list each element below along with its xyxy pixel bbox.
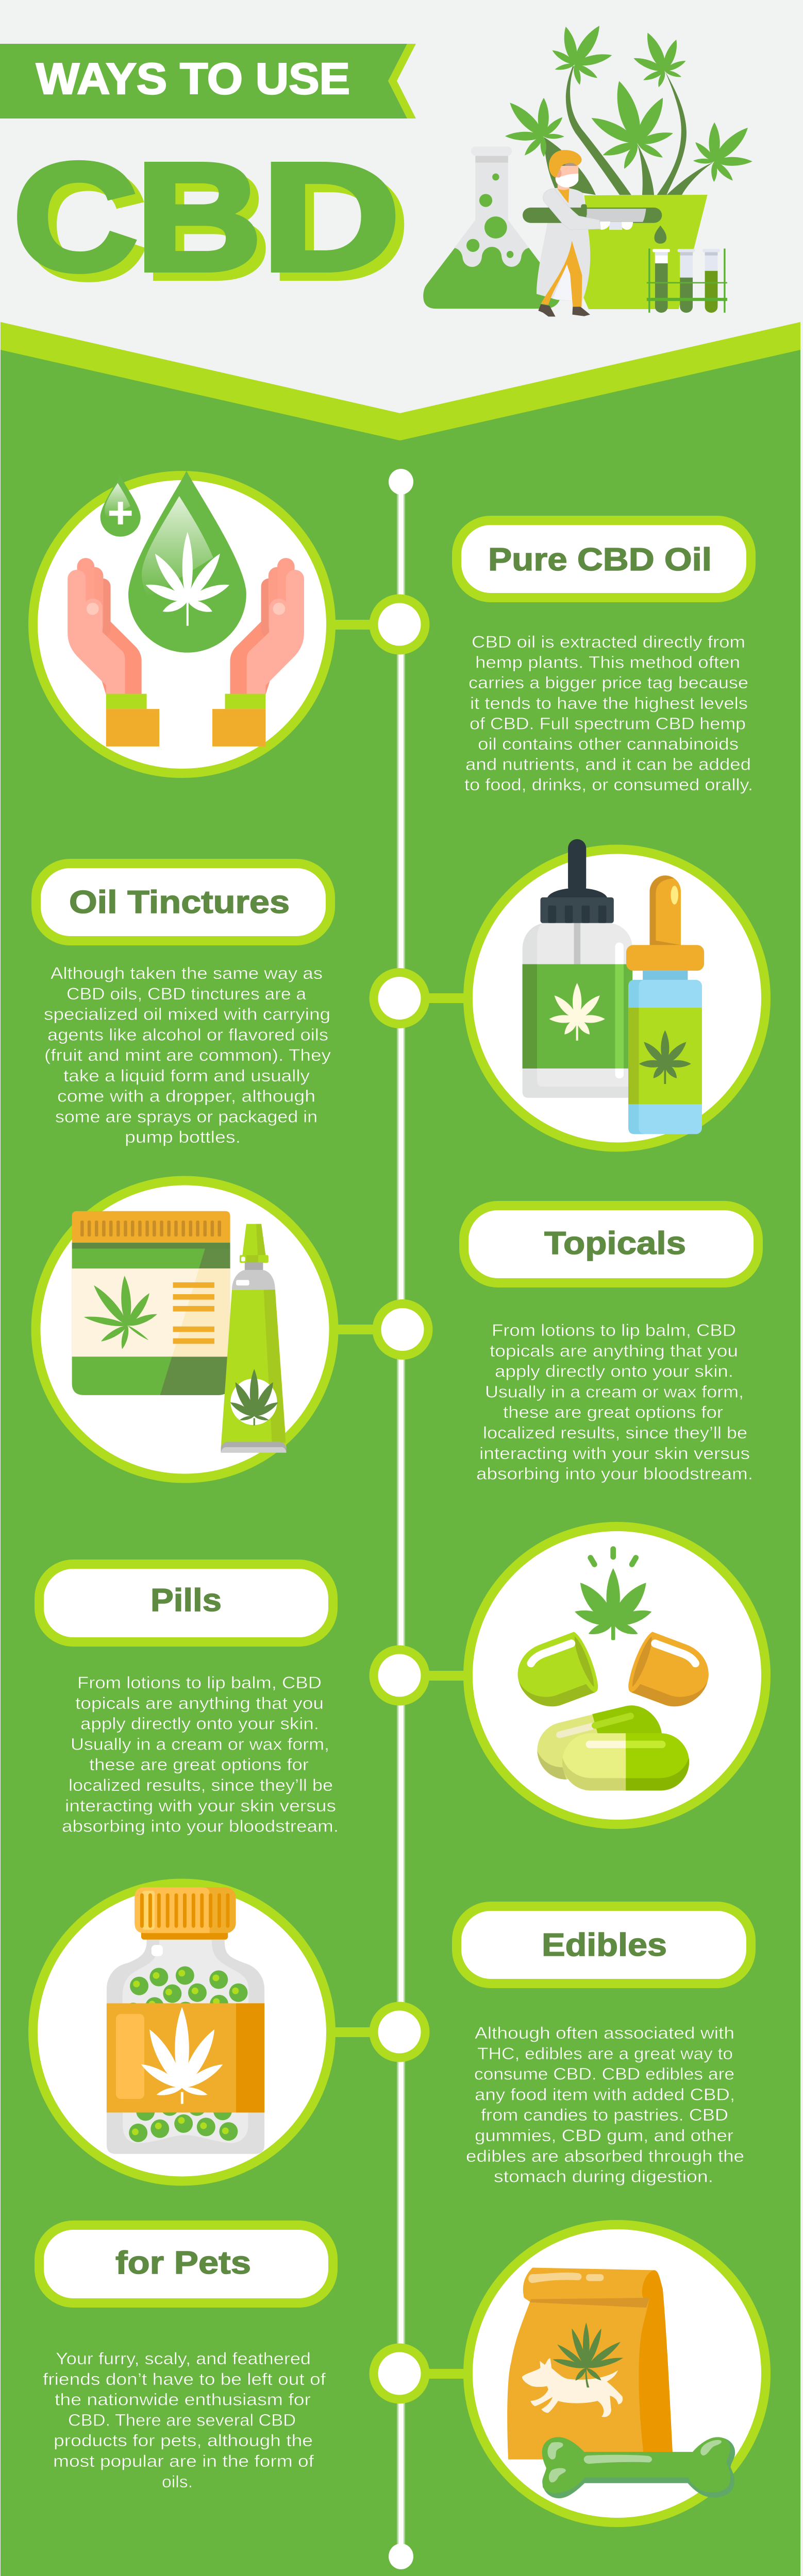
heading: CBD: B: [136, 131, 262, 302]
text block: Pure CBD Oil description: and nutrients, and it can be added: [465, 755, 751, 774]
text block: Edibles description: [466, 2024, 744, 2186]
text block: for Pets description: CBD. There are several CBD: [68, 2411, 296, 2429]
left hand: [68, 558, 159, 747]
heading: CBD: C: [13, 132, 138, 303]
text block: Pure CBD Oil description: carries a bigger price tag because: [469, 673, 748, 692]
text block: Oil Tinctures description: specialized oil mixed with carrying: [44, 1005, 330, 1023]
text block: Oil Tinctures description: take a liquid form and usually: [63, 1066, 310, 1085]
panel: Topicals title: [464, 1206, 758, 1283]
text block: Topicals description: these are great options for: [503, 1403, 723, 1421]
label: [107, 2003, 264, 2112]
text block: Edibles description: gummies, CBD gum, and other: [475, 2126, 733, 2145]
heading: CBD: B: [144, 139, 271, 311]
heading: CBD: [13, 131, 409, 311]
scientist: [523, 150, 662, 316]
text block: for Pets description: friends don’t have to be left out of: [43, 2370, 326, 2388]
panel: Pills title: [39, 1564, 333, 1642]
text block: Pure CBD Oil description: CBD oil is extracted directly from: [472, 633, 745, 651]
rays: [591, 1549, 636, 1564]
timeline node 1: [374, 599, 425, 650]
icon: pill bottle: [107, 1887, 264, 2154]
text block: Pills description: [62, 1673, 339, 1836]
tube: [221, 1224, 287, 1453]
dark dropper bottle: [523, 839, 632, 1098]
flask: [423, 146, 560, 309]
text block: for Pets description: most popular are in the form of: [53, 2452, 314, 2470]
panel: for Pets title: [39, 2225, 333, 2303]
text block: Topicals description: From lotions to lip balm, CBD: [492, 1321, 736, 1340]
text block: Pills description: From lotions to lip balm, CBD: [77, 1673, 322, 1692]
text block: Topicals description: [476, 1321, 753, 1483]
text block: Topicals description: Usually in a cream or wax form,: [485, 1382, 744, 1401]
panel: Topicals illustration circle: [36, 1181, 334, 1479]
panel: Pure CBD Oil illustration circle: [33, 476, 331, 773]
test tube rack: [647, 248, 727, 313]
text block: Pills description: Usually in a cream or wax form,: [71, 1735, 329, 1753]
text block: Pure CBD Oil description: to food, drinks, or consumed orally.: [464, 775, 753, 794]
green leaf: [573, 1568, 654, 1640]
text block: Oil Tinctures description: [44, 964, 331, 1146]
text block: Oil Tinctures description: pump bottles.: [125, 1128, 241, 1146]
icon: cream jar and tube: [72, 1211, 287, 1453]
right hand: [212, 558, 304, 747]
text block: Oil Tinctures description: come with a dropper, although: [57, 1087, 315, 1106]
text block: Pills description: interacting with your skin versus: [65, 1797, 336, 1815]
icon: hands holding oil drop: [68, 471, 304, 747]
text block: Topicals description: interacting with your skin versus: [479, 1444, 750, 1463]
open capsule halves: [517, 1632, 598, 1706]
text block: Pure CBD Oil description: it tends to have the highest levels: [470, 694, 748, 713]
orange dropper blue bottle: [626, 875, 704, 1134]
text block: Topicals description: absorbing into your bloodstream.: [476, 1465, 753, 1483]
panel: Pills title: Pills: [150, 1583, 222, 1618]
text block: for Pets description: products for pets, although the: [54, 2431, 313, 2450]
text block: Edibles description: any food item with added CBD,: [475, 2085, 735, 2104]
white cannabis leaf: [144, 532, 231, 626]
white leaf: [139, 2007, 225, 2104]
dog: [522, 2358, 623, 2417]
front capsule: [562, 1733, 689, 1790]
heading: CBD: D: [270, 139, 409, 311]
bone: [542, 2437, 735, 2498]
panel: Oil Tinctures title: [36, 863, 330, 941]
icon: capsules and leaf: [517, 1549, 709, 1790]
timeline node 2: [374, 973, 425, 1024]
timeline node 5: [374, 2006, 425, 2058]
jar: [72, 1211, 230, 1395]
text block: Topicals description: localized results, since they’ll be: [483, 1423, 747, 1442]
timeline node 4: [374, 1650, 425, 1701]
cannabis leaves: [505, 23, 752, 183]
drop highlight: [142, 496, 213, 597]
bag: [507, 2267, 673, 2460]
heading: CBD: D: [261, 131, 400, 303]
text block: Edibles description: THC, edibles are a great way to: [477, 2044, 733, 2063]
text block: Edibles description: from candies to pastries. CBD: [481, 2106, 728, 2124]
title banner: [0, 44, 416, 118]
text block: Edibles description: consume CBD. CBD edibles are: [474, 2065, 734, 2083]
icon: pet food bag and bone: [507, 2267, 735, 2498]
icon: dropper bottles: [523, 839, 704, 1134]
text block: Pills description: apply directly onto your skin.: [80, 1715, 319, 1733]
text block: Topicals description: apply directly onto your skin.: [495, 1362, 733, 1381]
text block: Topicals description: topicals are anything that you: [490, 1342, 738, 1360]
panel: Oil Tinctures title: Oil Tinctures: [69, 885, 290, 920]
text block: for Pets description: [43, 2349, 326, 2491]
panel: Pills illustration circle: [468, 1527, 766, 1824]
panel: Edibles illustration circle: [33, 1884, 331, 2181]
title banner: WAYS TO USE: [36, 55, 350, 104]
text block: Pills description: localized results, since they’ll be: [69, 1776, 333, 1794]
leaf on bag: [552, 2323, 624, 2387]
text block: Pure CBD Oil description: [464, 633, 753, 794]
panel: Oil Tinctures illustration circle: [468, 849, 766, 1147]
text block: Pills description: topicals are anything that you: [75, 1694, 324, 1713]
panel: Topicals title: Topicals: [544, 1226, 686, 1261]
panel: for Pets illustration circle: [468, 2225, 766, 2522]
timeline node 6: [374, 2348, 425, 2399]
text block: Oil Tinctures description: (fruit and mint are common). They: [44, 1046, 331, 1064]
small drop with plus: [101, 474, 141, 537]
illustration: scientist with plants, flask and test tubes: [423, 23, 752, 316]
panel: Edibles title: Edibles: [542, 1927, 667, 1963]
bottle glass: [107, 1940, 264, 2154]
text block: for Pets description: the nationwide enthusiasm for: [55, 2391, 311, 2409]
plant stems: [544, 66, 713, 195]
heading: CBD: C: [22, 140, 147, 311]
text block: Oil Tinctures description: agents like alcohol or flavored oils: [47, 1025, 328, 1044]
connector bars: [332, 620, 466, 2379]
big drop: [128, 471, 246, 653]
pills: [124, 1966, 248, 2142]
oil drop: [655, 226, 666, 244]
panel: Pure CBD Oil title: [457, 520, 751, 598]
text block: Edibles description: edibles are absorbed through the: [466, 2147, 744, 2165]
text block: Edibles description: stomach during digestion.: [494, 2167, 713, 2186]
text block: Oil Tinctures description: CBD oils, CBD tinctures are a: [66, 985, 306, 1003]
timeline node 3: [377, 1303, 428, 1355]
cap: [135, 1887, 236, 1940]
text block: Oil Tinctures description: Although taken the same way as: [51, 964, 323, 982]
text block: Pills description: these are great options for: [89, 1755, 309, 1774]
text block: for Pets description: Your furry, scaly, and feathered: [56, 2349, 311, 2368]
back capsule: [537, 1705, 662, 1780]
text block: Edibles description: Although often associated with: [475, 2024, 734, 2042]
panel: Pure CBD Oil title: Pure CBD Oil: [488, 542, 712, 578]
timeline line: [389, 469, 413, 2569]
text block: Pills description: absorbing into your bloodstream.: [62, 1817, 339, 1836]
text block: Pure CBD Oil description: hemp plants. This method often: [475, 653, 740, 672]
text block: Oil Tinctures description: some are sprays or packaged in: [55, 1107, 317, 1126]
panel: for Pets title: for Pets: [115, 2245, 251, 2281]
pot: [583, 195, 708, 309]
text block: Pure CBD Oil description: oil contains other cannabinoids: [478, 735, 739, 753]
text block: Pure CBD Oil description: of CBD. Full spectrum CBD hemp: [470, 714, 746, 733]
text block: for Pets description: oils.: [162, 2472, 193, 2491]
panel: Edibles title: [457, 1906, 751, 1984]
